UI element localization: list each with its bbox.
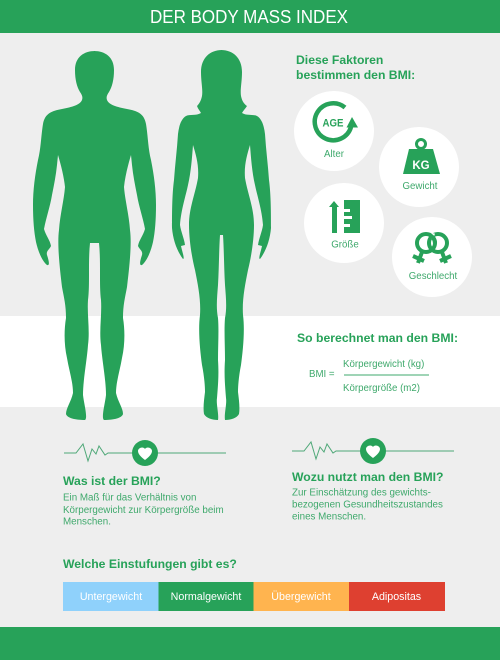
formula: Körpergröße (m2) <box>343 383 420 394</box>
icon: age ring: AGE <box>322 118 344 130</box>
header: title: DER BODY MASS INDEX <box>150 7 348 27</box>
text block: Was ist der BMI: Körpergewicht zur Körpergröße beim <box>63 505 224 516</box>
factor: Größe: Größe <box>331 240 359 250</box>
factor: Gewicht: Gewicht <box>402 181 438 192</box>
factor: Alter: Alter <box>324 149 345 160</box>
white formula band <box>0 316 500 407</box>
category bar: Untergewicht <box>80 591 142 603</box>
icon: ruler and arrow <box>329 200 360 233</box>
formula <box>309 359 429 394</box>
header: title <box>0 0 500 33</box>
icon: interlocked gender symbols <box>413 234 451 263</box>
category bar: Übergewicht <box>271 591 331 603</box>
icon: heart <box>138 448 152 460</box>
text block: Wozu nutzt man den BMI <box>292 470 443 522</box>
heading: formula: So berechnet man den BMI: <box>297 331 458 345</box>
factor: Geschlecht <box>392 217 472 297</box>
text block: Wozu nutzt man den BMI: Zur Einschätzung des gewichts- <box>292 488 431 498</box>
text block: Was ist der BMI <box>63 474 224 528</box>
category bar: Normalgewicht <box>171 591 241 603</box>
text block: Was ist der BMI: Was ist der BMI? <box>63 474 161 488</box>
icon: heart <box>366 446 380 458</box>
pulse divider right <box>292 438 454 464</box>
female silhouette <box>172 50 271 420</box>
heading: factors <box>296 53 415 82</box>
text block: Wozu nutzt man den BMI: Wozu nutzt man den BMI? <box>292 470 443 484</box>
factor: Größe <box>304 183 384 263</box>
text block: Wozu nutzt man den BMI: eines Menschen. <box>292 512 366 522</box>
formula: Körpergewicht (kg) <box>343 359 424 370</box>
text block: Wozu nutzt man den BMI: bezogenen Gesundheitszustandes <box>292 500 443 510</box>
pulse divider left <box>64 440 226 466</box>
heading: factors: Diese Faktoren <box>296 53 383 67</box>
factor: Gewicht <box>379 127 459 207</box>
text block: Was ist der BMI: Ein Maß für das Verhältnis von <box>63 492 196 504</box>
category bar <box>63 582 445 611</box>
factor: Geschlecht: Geschlecht <box>409 271 458 282</box>
text block: Was ist der BMI: Menschen. <box>63 516 111 528</box>
heading: categories: Welche Einstufungen gibt es? <box>63 557 237 571</box>
footer bar <box>0 627 500 660</box>
category bar: Adipositas <box>372 591 421 603</box>
factor: Alter <box>294 91 374 171</box>
heading: factors: bestimmen den BMI: <box>296 68 415 82</box>
icon: weight: KG <box>412 160 430 172</box>
male silhouette <box>33 51 156 420</box>
formula: BMI = <box>309 369 335 380</box>
